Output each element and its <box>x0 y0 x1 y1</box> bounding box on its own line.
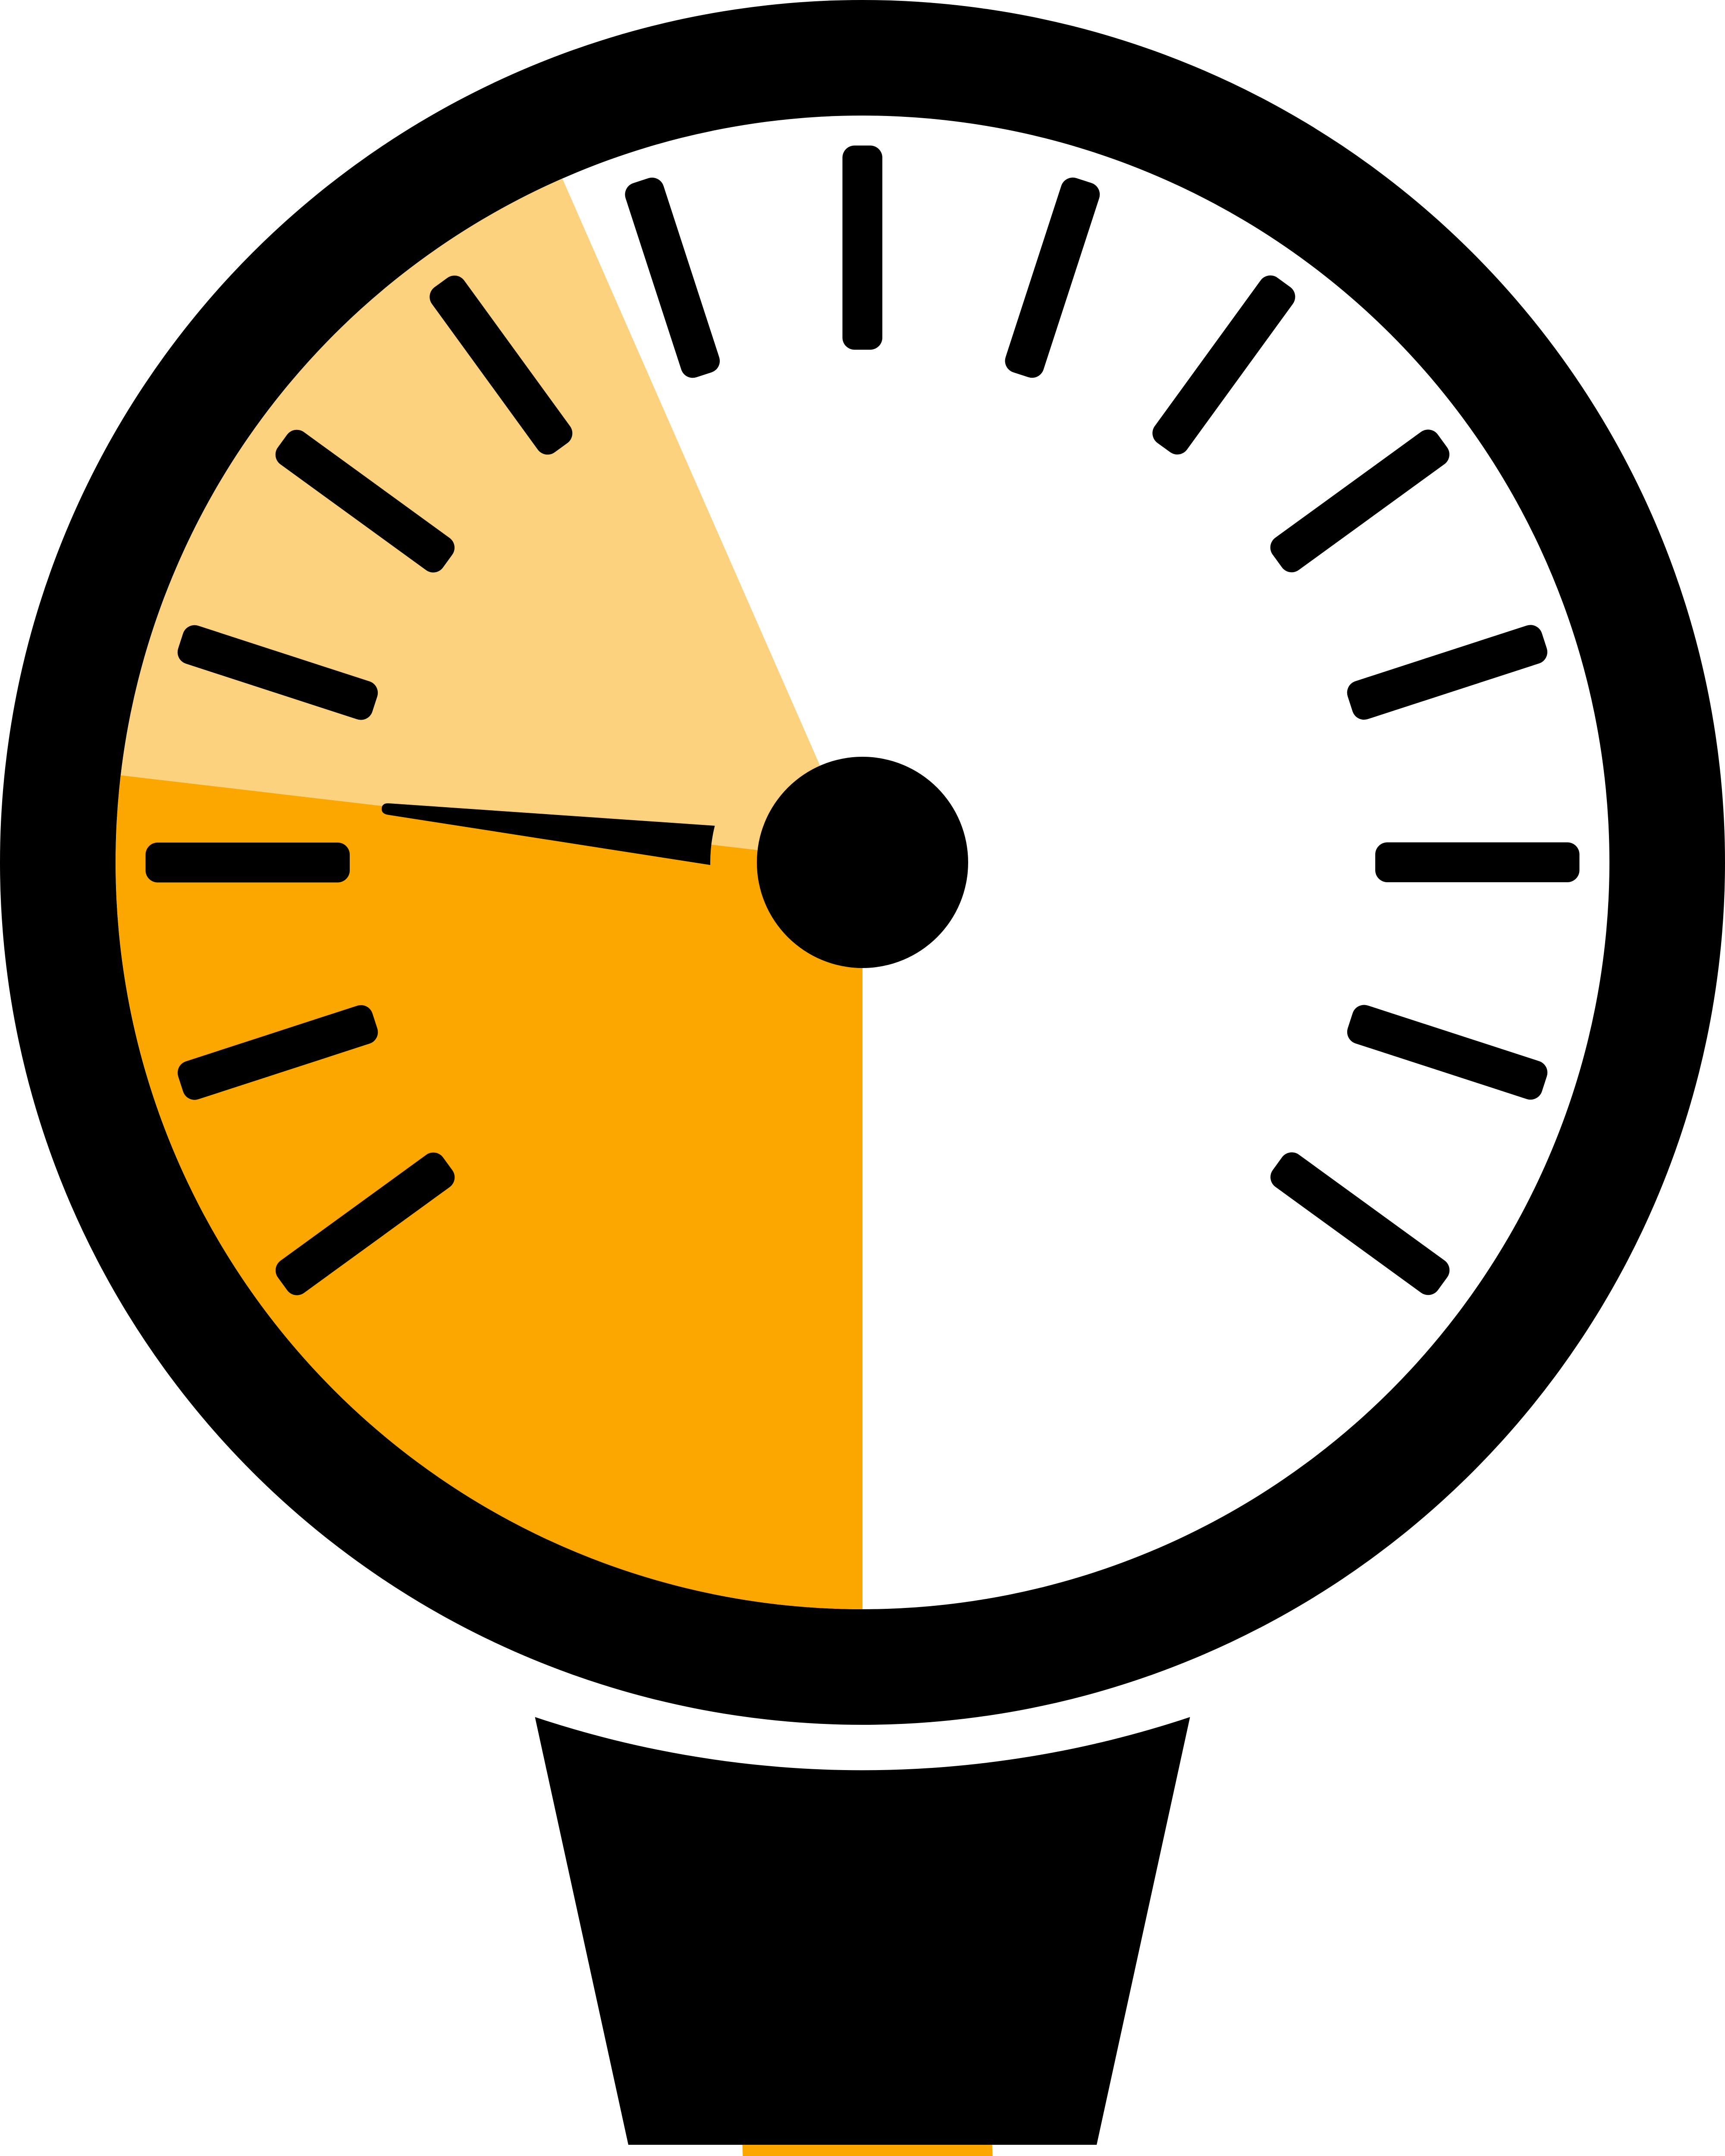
needle hub <box>757 757 968 968</box>
light orange warning sector <box>121 179 862 862</box>
needle <box>382 803 715 865</box>
dark orange value sector <box>116 775 862 1609</box>
tick marks <box>146 146 1579 1300</box>
gauge white face <box>116 116 1609 1609</box>
gauge outer ring <box>0 0 1725 1725</box>
black trapezoid connector <box>535 1717 1190 2145</box>
orange stem <box>742 2139 1037 2156</box>
